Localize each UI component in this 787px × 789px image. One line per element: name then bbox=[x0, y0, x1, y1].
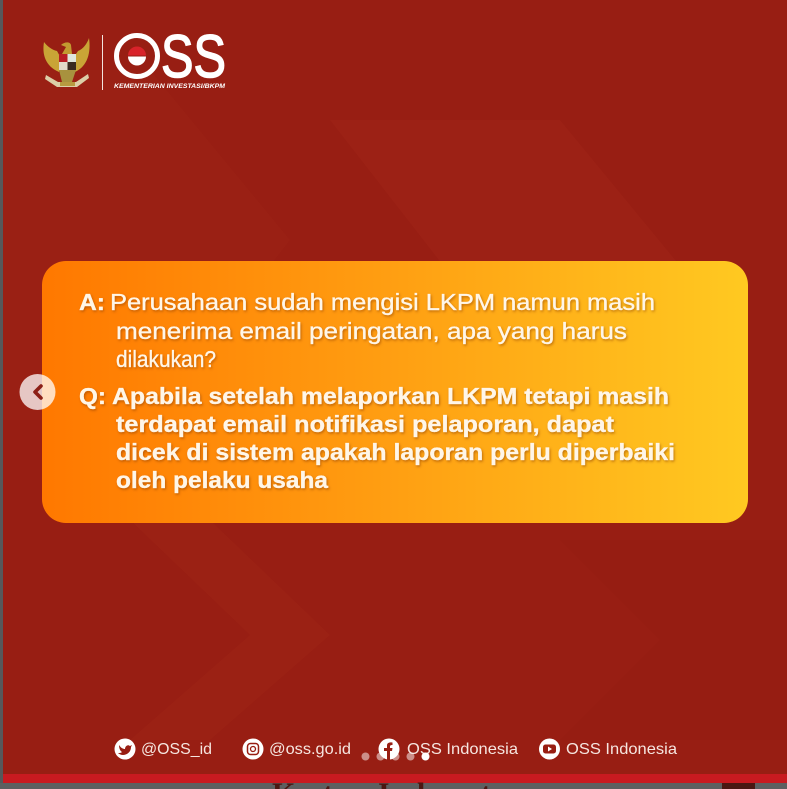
answer text: Q: bbox=[79, 383, 106, 409]
left page edge bbox=[0, 0, 3, 789]
logo divider bbox=[102, 35, 103, 90]
bottom red stripe bbox=[3, 774, 787, 783]
answer text: dicek di sistem apakah laporan perlu diperbaiki bbox=[116, 439, 675, 465]
logo: OSS wordmark bbox=[114, 23, 226, 90]
social: facebook bbox=[378, 738, 518, 760]
panel: question and answer card bbox=[42, 261, 748, 523]
carousel previous button bbox=[20, 374, 56, 410]
social: twitter: @OSS_id bbox=[141, 741, 212, 758]
question text: A: bbox=[79, 289, 105, 315]
answer text bbox=[79, 383, 675, 493]
question text: dilakukan? bbox=[116, 346, 216, 372]
question text: menerima email peringatan, apa yang harus bbox=[116, 318, 627, 344]
bottom page strip bbox=[0, 777, 787, 789]
social: facebook: OSS Indonesia bbox=[407, 741, 518, 758]
answer text: oleh pelaku usaha bbox=[116, 467, 328, 493]
logo: OSS wordmark: KEMENTERIAN INVESTASI/BKPM bbox=[114, 83, 225, 90]
question text: Perusahaan sudah mengisi LKPM namun masih bbox=[110, 289, 655, 315]
answer text: Apabila setelah melaporkan LKPM tetapi masih bbox=[112, 383, 669, 409]
social: instagram: @oss.go.id bbox=[269, 741, 351, 758]
logo: OSS wordmark: SS bbox=[161, 23, 226, 90]
social: instagram bbox=[242, 738, 351, 760]
social: youtube bbox=[539, 738, 677, 760]
social: twitter bbox=[114, 738, 212, 760]
logo: garuda emblem bbox=[43, 38, 90, 87]
carousel pagination dots bbox=[362, 752, 430, 760]
social: youtube: OSS Indonesia bbox=[566, 741, 677, 758]
question text bbox=[79, 289, 655, 372]
answer text: terdapat email notifikasi pelaporan, dapat bbox=[116, 411, 614, 437]
